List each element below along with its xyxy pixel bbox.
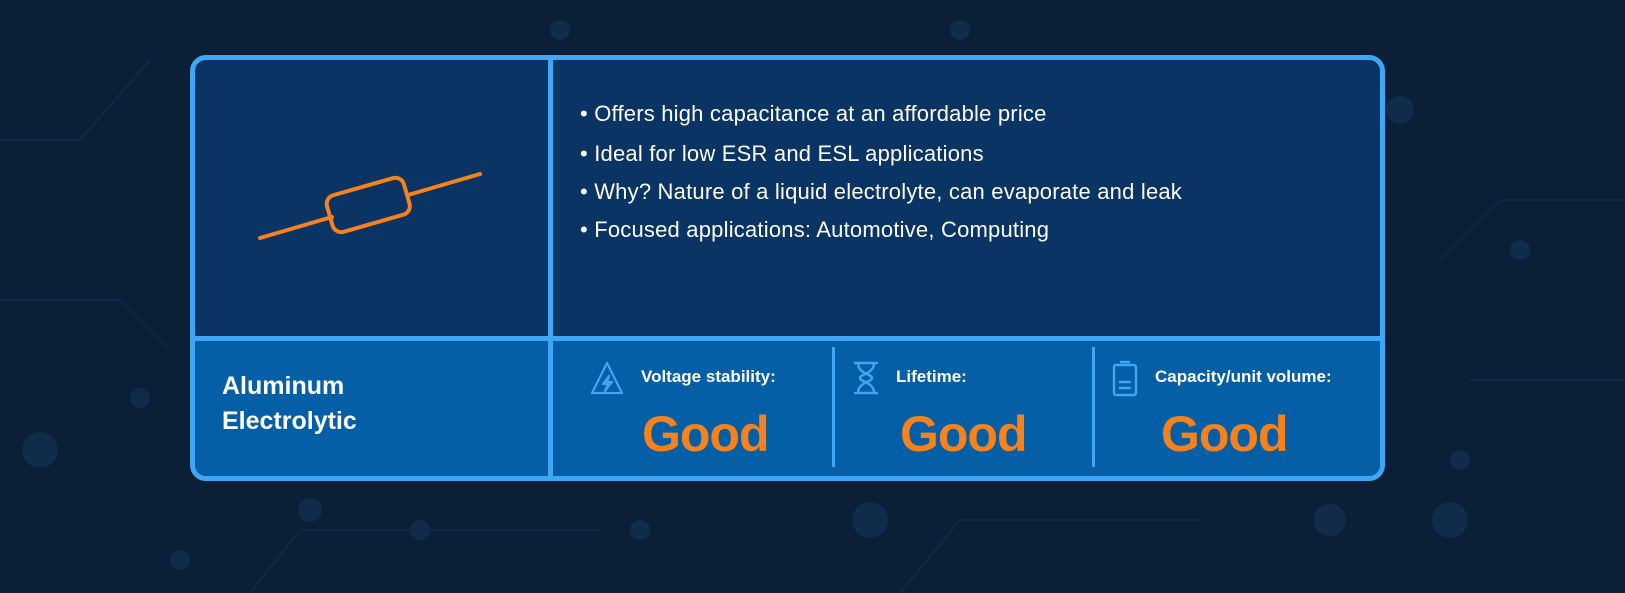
title: Aluminum bbox=[222, 372, 344, 400]
horizontal divider bbox=[195, 336, 1390, 341]
title bbox=[222, 372, 357, 435]
metric sub-dividers bbox=[832, 347, 835, 467]
metric: voltage stability: Good bbox=[642, 406, 769, 462]
bullet 1: • Offers high capacitance at an affordable price bbox=[580, 101, 1047, 126]
title: Electrolytic bbox=[222, 407, 357, 435]
bullet 2: • Ideal for low ESR and ESL applications bbox=[580, 141, 984, 166]
metric: lifetime bbox=[854, 362, 1027, 462]
icon: hourglass bbox=[854, 362, 878, 394]
metric: voltage stability: Voltage stability: bbox=[641, 367, 776, 386]
metric: capacity per unit volume bbox=[1112, 360, 1332, 462]
vertical divider bbox=[548, 60, 553, 486]
icon: capacitor bbox=[258, 172, 482, 240]
metric: lifetime: Good bbox=[900, 406, 1027, 462]
metric: voltage stability bbox=[590, 362, 776, 462]
bottom row background bbox=[195, 338, 1390, 488]
bullet list bbox=[580, 101, 1182, 242]
metric: lifetime: Lifetime: bbox=[896, 367, 967, 386]
card bbox=[190, 55, 1385, 481]
metric: capacity per unit volume: Capacity/unit volume: bbox=[1155, 367, 1332, 386]
metric: capacity per unit volume: Good bbox=[1161, 406, 1288, 462]
icon: warning bolt bbox=[590, 362, 624, 394]
icon: battery bbox=[1112, 360, 1138, 396]
bullet 3: • Why? Nature of a liquid electrolyte, can evaporate and leak bbox=[580, 179, 1182, 204]
bullet 4: • Focused applications: Automotive, Computing bbox=[580, 217, 1049, 242]
